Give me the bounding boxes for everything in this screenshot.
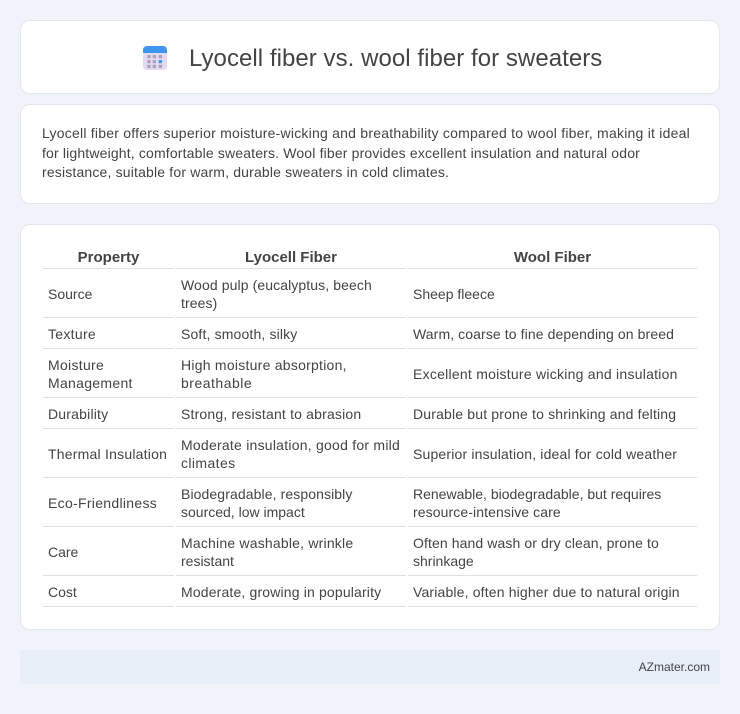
row: Care	[48, 535, 659, 569]
row: Texture: Texture	[48, 326, 96, 342]
row: Eco-Friendliness: resource-intensive care	[413, 504, 561, 520]
text block: introduction: Lyocell fiber offers superior moisture-wicking and breathability compared to wool fiber, making it ideal	[42, 125, 690, 141]
row: Thermal Insulation: climates	[181, 455, 236, 471]
row: Cost: Cost	[48, 584, 77, 600]
table header: Property	[78, 249, 139, 266]
panel: introduction	[20, 104, 720, 204]
row: Source	[48, 277, 495, 311]
row: Cost: Moderate, growing in popularity	[181, 584, 381, 600]
title: Lyocell fiber vs. wool fiber for sweaters	[189, 45, 602, 72]
row: Source: Sheep fleece	[413, 286, 495, 302]
row: Moisture Management: Management	[48, 375, 133, 391]
text block: introduction	[42, 125, 690, 180]
row: Eco-Friendliness: Renewable, biodegradable, but requires	[413, 486, 661, 502]
row: Moisture Management: Excellent moisture wicking and insulation	[413, 366, 678, 382]
row: Cost	[48, 584, 680, 600]
row: Source: Wood pulp (eucalyptus, beech	[181, 277, 372, 293]
row: Care: Often hand wash or dry clean, prone to	[413, 535, 659, 551]
table header: Lyocell Fiber	[245, 249, 337, 266]
row: Care: Machine washable, wrinkle	[181, 535, 353, 551]
row: Moisture Management: High moisture absorption,	[181, 357, 347, 373]
panel: comparison table	[20, 224, 720, 630]
table header	[78, 249, 591, 266]
text block: introduction: resistance, suitable for warm, durable sweaters in cold climates.	[42, 164, 449, 180]
row: Care: resistant	[181, 553, 234, 569]
row: Texture: Soft, smooth, silky	[181, 326, 297, 342]
row: Moisture Management	[48, 357, 678, 391]
row: Thermal Insulation: Moderate insulation, good for mild	[181, 437, 400, 453]
row: Thermal Insulation: Thermal Insulation	[48, 446, 167, 462]
row: Cost: Variable, often higher due to natural origin	[413, 584, 680, 600]
icon: calendar	[143, 46, 167, 70]
row: Durability: Strong, resistant to abrasion	[181, 406, 361, 422]
row: Thermal Insulation	[48, 437, 677, 471]
row: Eco-Friendliness	[48, 486, 661, 520]
table header: Wool Fiber	[514, 249, 591, 266]
row: Texture	[48, 326, 674, 342]
row: Care: shrinkage	[413, 553, 474, 569]
row: Moisture Management: Moisture	[48, 357, 104, 373]
footer bar	[20, 650, 720, 684]
row: Eco-Friendliness: Biodegradable, responsibly	[181, 486, 352, 502]
row: Eco-Friendliness: Eco-Friendliness	[48, 495, 157, 511]
text block: introduction: for lightweight, comfortable sweaters. Wool fiber provides excellent insulation and natural odor	[42, 144, 640, 160]
row: Durability: Durable but prone to shrinking and felting	[413, 406, 676, 422]
row: Texture: Warm, coarse to fine depending on breed	[413, 326, 674, 342]
row: Moisture Management: breathable	[181, 375, 252, 391]
panel: title header	[20, 20, 720, 94]
row: Source: trees)	[181, 295, 217, 311]
row: Thermal Insulation: Superior insulation, ideal for cold weather	[413, 446, 677, 462]
row: Durability	[48, 406, 676, 422]
row: Eco-Friendliness: sourced, low impact	[181, 504, 305, 520]
row: Care: Care	[48, 544, 78, 560]
row: Durability: Durability	[48, 406, 108, 422]
footer credit: AZmater.com	[639, 660, 710, 674]
row: Source: Source	[48, 286, 92, 302]
